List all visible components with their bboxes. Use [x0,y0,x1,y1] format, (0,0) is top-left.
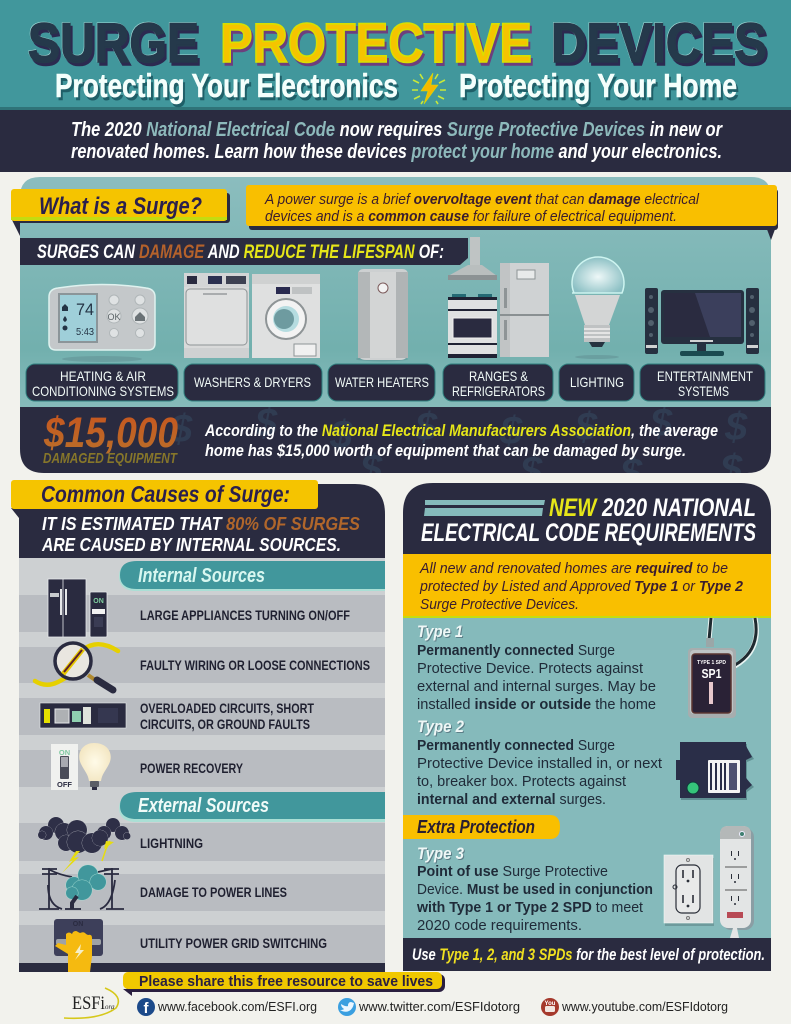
definition callout [246,185,778,240]
extra protection pill: Extra Protection [417,817,535,837]
icon: on off switch and bulb: ON [59,748,70,757]
icon: large appliance and switch: ON [93,598,104,605]
text: overloaded circuits [140,701,315,732]
type 3 block [416,844,653,934]
title: SURGE [30,14,201,77]
social: facebook: www.facebook.com/ESFI.org [157,999,317,1014]
intro text: renovated homes. Learn how these devices protect your home and your electronics. [71,141,722,163]
text: power recovery: POWER RECOVERY [140,761,243,776]
cost strip: $ [619,451,643,495]
type 2 block: Protective Device installed in, or next [417,756,662,772]
label: heating and air [26,364,178,401]
icon: entertainment system [645,288,759,356]
icon: wall outlet [664,855,714,926]
type 3 block: 2020 code requirements. [417,918,582,934]
best protection banner [403,938,771,971]
share banner [123,972,445,996]
label: lighting [559,364,634,401]
logo: ESFI.org: ESFi [72,993,105,1014]
text: faulty wiring: FAULTY WIRING OR LOOSE CONNECTIONS [140,658,370,673]
social: facebook [137,998,317,1017]
panel: what is a surge [11,177,778,495]
causes header: IT IS ESTIMATED THAT 80% OF SURGES [42,513,361,534]
social: twitter: www.twitter.com/ESFIdotorg [358,999,520,1014]
logo: ESFI.org: org [105,1003,115,1011]
cost strip: $ [719,447,743,491]
cost strip: $ [254,401,278,445]
title: PROTECTIVE [222,14,534,77]
text: overloaded circuits: CIRCUITS, OR GROUND FAULTS [140,717,310,732]
cost strip: $ [414,405,438,449]
stat: $15,000: DAMAGED EQUIPMENT [43,450,178,467]
type 2 block: to, breaker box. Protects against [417,774,626,790]
type 2 block: Type 2 [417,717,464,736]
header band [0,0,791,110]
icon: type 1 SPD: SP1 [702,666,722,681]
icon: circuit breaker [40,703,126,728]
title: SURGE [28,11,199,74]
type 2 block: Type 2 [418,718,465,737]
labels: appliance categories [26,364,765,401]
subtitle left: Protecting Your Electronics [55,67,398,104]
cost strip: $ [359,447,383,491]
requirement callout [403,554,771,618]
type 2 block: Permanently connected Surge [417,738,615,754]
title: DEVICES [550,10,766,74]
external sources pill: External Sources [138,795,269,817]
label: entertainment systems: SYSTEMS [678,383,729,399]
cost text: home has $15,000 worth of equipment that can be damaged by surge. [205,441,686,460]
cost strip: $ [169,407,193,451]
type 3 block: Device. Must be used in conjunction [417,882,653,898]
label: heating and air: CONDITIONING SYSTEMS [32,383,174,399]
cost strip [20,407,771,473]
icon: storm clouds [38,817,130,873]
type 1 block: installed inside or outside the home [417,697,656,713]
icon: damaged power lines [39,865,124,909]
cost strip: $ [574,405,598,449]
type 3 block: Type 3 [417,844,464,863]
label: washers and dryers: WASHERS & DRYERS [194,374,311,390]
icon: hand on grid switch [54,919,103,972]
icon: thermostat [49,284,155,362]
label: washers and dryers [184,364,322,401]
icon: range and refrigerator [448,237,549,358]
subtitle left: Protecting Your Electronics [57,70,400,107]
cost text: According to the National Electrical Manufacturers Association, the average [204,421,718,440]
text: large appliances: LARGE APPLIANCES TURNING ON/OFF [140,608,350,623]
definition callout: A power surge is a brief overvoltage event that can damage electrical [264,191,700,208]
internal sources pill [119,561,385,591]
label: entertainment systems: ENTERTAINMENT [657,368,753,384]
title: PROTECTIVE [220,11,532,74]
causes header [11,480,385,558]
icon: faulty wiring magnifier [35,643,118,690]
requirement callout: All new and renovated homes are required to be [419,560,728,577]
title [28,10,769,77]
icon: thermostat: 74 [76,300,94,319]
icon: thermostat: OK [107,312,121,322]
label: ranges and refrigerators: RANGES & [469,368,529,384]
requirement callout: Surge Protective Devices. [420,596,579,613]
panel: common causes of surge [11,480,385,972]
code header: NEW 2020 NATIONAL [549,494,756,522]
icon: hand on grid switch: ON [73,921,83,928]
intro text [71,119,723,163]
external sources pill [119,792,385,822]
definition callout: devices and is a common cause for failure of electrical equipment. [265,208,677,225]
intro band [0,110,791,172]
label: ranges and refrigerators [443,364,553,401]
what is a surge heading: What is a Surge? [39,193,202,220]
type 1 block: Type 1 [418,623,464,642]
title: SURGE [28,10,198,74]
share banner: Please share this free resource to save lives [139,974,433,990]
cost strip: $ [724,405,748,449]
icon: thermostat: 5:43 [76,326,94,338]
cost strip: $ [499,409,523,453]
icon: type 2 SPD [676,742,754,800]
icon: large appliance and switch [48,579,107,637]
social: youtube: www.youtube.com/ESFIdotorg [561,999,728,1014]
logo: ESFI.org [64,988,118,1018]
requirement callout: protected by Listed and Approved Type 1 or Type 2 [419,578,744,595]
text: damage to power lines: DAMAGE TO POWER LINES [140,885,287,900]
cost text [204,421,718,460]
type 1 block: Permanently connected Surge [417,643,615,659]
label: lighting: LIGHTING [570,374,624,390]
text: utility power grid: UTILITY POWER GRID SWITCHING [140,936,327,951]
type 3 block: Point of use Surge Protective [417,864,608,880]
text: lightning: LIGHTNING [140,836,203,851]
icon: lightning bolt [412,73,446,104]
cost strip: $ [329,413,353,457]
icon: dishwasher and washer [184,273,320,358]
type 1 block [417,622,656,713]
icon: type 1 SPD [688,618,756,718]
cost strip: $ [649,401,673,445]
icon: on off switch and bulb: OFF [57,780,72,789]
type 1 block: Type 1 [417,622,463,641]
icon: light bulb [572,257,624,359]
panel: 2020 code requirements [403,483,771,971]
type 2 block [417,717,662,808]
type 1 block: Protective Device. Protects against [417,661,643,677]
internal sources pill: Internal Sources [138,565,265,587]
type 3 block: Type 3 [418,845,465,864]
label: water heaters [328,364,435,401]
label: entertainment systems [640,364,765,401]
type 2 block: internal and external surges. [417,792,606,808]
causes header: ARE CAUSED BY INTERNAL SOURCES. [41,534,341,555]
social: youtube: You [545,1001,556,1007]
causes header: Common Causes of Surge: [41,481,290,507]
type 3 block: with Type 1 or Type 2 SPD to meet [416,900,643,916]
stat: $15,000: $15,000 [43,409,178,457]
type 1 block: external and internal surges. May be [417,679,656,695]
label: water heaters: WATER HEATERS [335,374,429,390]
label: heating and air: HEATING & AIR [60,368,146,384]
icon: on off switch and bulb [51,743,111,790]
what is a surge heading [11,189,230,236]
text: overloaded circuits: OVERLOADED CIRCUITS, SHORT [140,701,315,716]
label: ranges and refrigerators: REFRIGERATORS [452,383,545,399]
surges can damage banner: SURGES CAN DAMAGE AND REDUCE THE LIFESPAN OF: [37,242,444,263]
code header [403,483,771,554]
icon: water heater [356,269,408,362]
cost strip: $ [519,449,543,493]
title: DEVICES [551,11,767,74]
icon: power strip [720,826,754,938]
intro text: The 2020 National Electrical Code now requires Surge Protective Devices in new or [71,119,723,141]
icon: type 1 SPD: TYPE 1 SPD [697,660,726,666]
social: facebook: f [144,1000,150,1017]
